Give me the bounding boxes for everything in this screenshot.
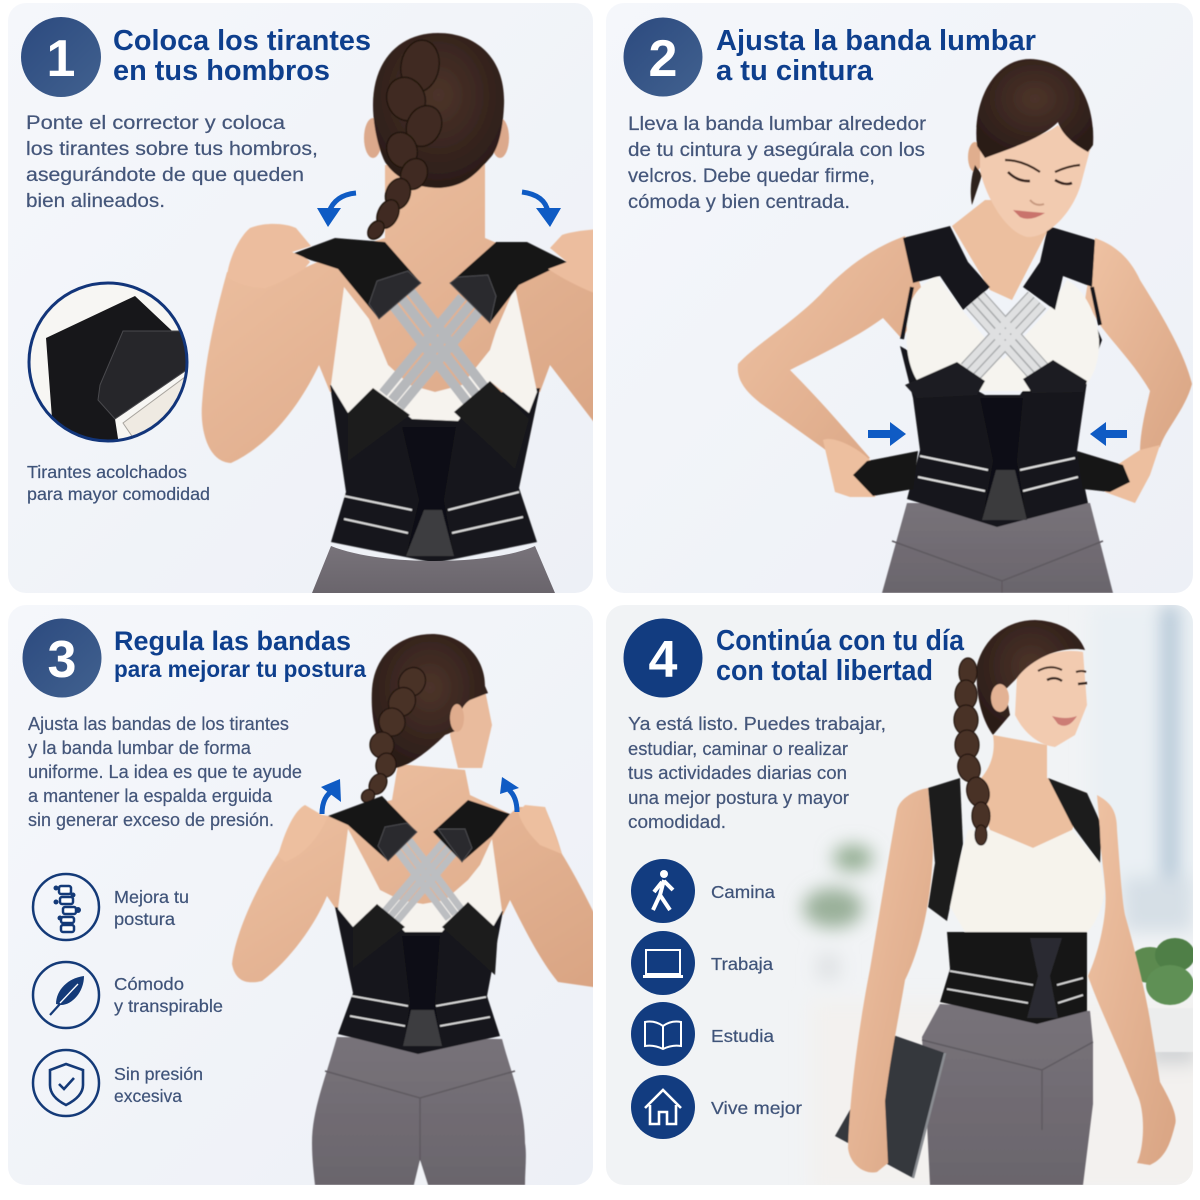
number badge 4 <box>624 618 702 698</box>
label: sin presion excesiva: Sin presión <box>114 1064 203 1084</box>
number badge 3: 3 <box>48 631 76 689</box>
label: comodo y transpirable <box>114 974 223 1016</box>
inset caption <box>27 462 210 504</box>
heading 2: a tu cintura <box>716 55 874 87</box>
number badge 2: 2 <box>649 30 677 88</box>
number badge 1 <box>21 17 101 97</box>
body text 2: cómoda y bien centrada. <box>628 192 850 213</box>
label: comodo y transpirable: y transpirable <box>114 996 223 1016</box>
body text 2 <box>628 114 927 213</box>
arrow: right strap up <box>500 777 519 812</box>
number badge 4: 4 <box>649 631 678 689</box>
icon: spine <box>33 874 99 940</box>
label: mejora tu postura: Mejora tu <box>114 887 189 907</box>
body text 4: tus actividades diarias con <box>628 763 847 783</box>
body text 4: una mejor postura y mayor <box>628 788 849 808</box>
label: vive mejor: Vive mejor <box>711 1098 802 1118</box>
body text 3: Ajusta las bandas de los tirantes <box>28 714 289 734</box>
label: sin presion excesiva: excesiva <box>114 1086 182 1106</box>
body text 4: comodidad. <box>628 812 726 832</box>
heading 2 <box>716 29 1036 80</box>
label: sin presion excesiva <box>114 1066 202 1102</box>
panel 1: coloca los tirantes <box>8 3 600 593</box>
heading 2: Ajusta la banda lumbar <box>716 25 1036 57</box>
label: estudia: Estudia <box>711 1026 774 1046</box>
blurred room background <box>794 605 1193 1075</box>
icon: walking <box>631 859 695 923</box>
label: mejora tu postura: postura <box>114 909 175 929</box>
body text 3: uniforme. La idea es que te ayude <box>28 762 302 782</box>
icon: laptop <box>631 931 695 995</box>
body text 3: a mantener la espalda erguida <box>28 786 273 806</box>
label: trabaja: Trabaja <box>711 954 773 974</box>
body text 3 <box>28 714 302 830</box>
panel 3: regula las bandas <box>8 605 600 1185</box>
heading 4: con total libertad <box>716 655 933 687</box>
woman from behind adjusting straps <box>202 33 600 563</box>
body text 3: sin generar exceso de presión. <box>28 810 274 830</box>
arrow: belt right <box>868 422 906 446</box>
panel 4: continua con tu dia <box>606 605 1200 1195</box>
heading 3: para mejorar tu postura <box>114 656 366 682</box>
label: mejora tu postura <box>114 887 189 929</box>
heading 1: en tus hombros <box>113 55 330 87</box>
heading 1 <box>114 29 370 80</box>
heading 3 <box>114 626 366 682</box>
label: camina: Camina <box>711 882 775 902</box>
number badge 1: 1 <box>47 30 75 88</box>
arrow: belt left <box>1090 422 1127 446</box>
heading 1: Coloca los tirantes <box>113 25 371 57</box>
woman walking with laptop <box>835 620 1176 1185</box>
body text 2: velcros. Debe quedar firme, <box>628 166 875 187</box>
icon: shield <box>33 1050 99 1116</box>
heading 4: Continúa con tu día <box>716 625 965 657</box>
arrow: left strap down <box>317 193 356 227</box>
panel 2: ajusta la banda lumbar <box>606 3 1193 593</box>
body text 4: Ya está listo. Puedes trabajar, <box>628 714 886 734</box>
body text 3: y la banda lumbar de forma <box>28 738 252 758</box>
label: comodo y transpirable: Cómodo <box>114 974 184 994</box>
body text 1 <box>26 113 318 212</box>
inset caption: Tirantes acolchados <box>27 462 187 482</box>
number badge 2 <box>624 18 702 96</box>
body text 1: los tirantes sobre tus hombros, <box>26 139 318 160</box>
leggings 1 <box>312 546 555 593</box>
woman from front tightening belt <box>738 59 1192 593</box>
icon: house <box>631 1075 695 1139</box>
body text 2: de tu cintura y asegúrala con los <box>628 140 925 161</box>
body text 4: estudiar, caminar o realizar <box>628 739 848 759</box>
inset caption: para mayor comodidad <box>27 484 210 504</box>
body text 1: bien alineados. <box>26 191 165 212</box>
arrow: left strap up <box>321 779 341 814</box>
body text 4 <box>628 714 886 832</box>
woman from behind lifting straps <box>232 634 600 1185</box>
number badge 3 <box>22 618 102 698</box>
body text 1: Ponte el corrector y coloca <box>26 113 285 134</box>
body text 1: asegurándote de que queden <box>26 165 304 186</box>
body text 2: Lleva la banda lumbar alrededor <box>628 114 927 135</box>
heading 3: Regula las bandas <box>114 626 351 656</box>
arrow: right strap down <box>522 192 561 227</box>
inset: padded strap detail <box>29 283 188 445</box>
foreground plant <box>1134 937 1193 1052</box>
heading 4 <box>717 628 964 680</box>
icon: book <box>631 1002 695 1066</box>
icon: feather <box>33 962 99 1028</box>
